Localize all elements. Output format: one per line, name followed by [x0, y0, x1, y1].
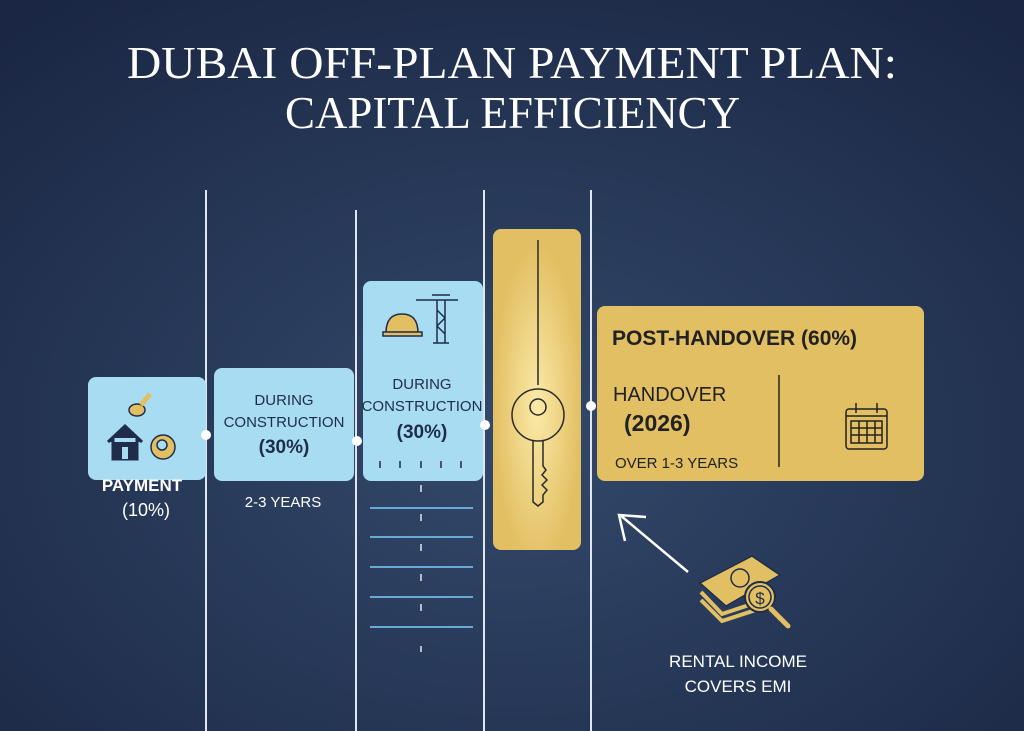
panel: post-handover 60%: POST-HANDOVER (60%) — [612, 327, 857, 350]
title — [127, 37, 897, 138]
icon: money with magnifier: $ — [755, 589, 765, 608]
panel: during construction 30% a — [214, 368, 354, 511]
panel: during construction 30% a: CONSTRUCTION — [224, 414, 344, 431]
icon: key — [512, 240, 564, 506]
arrow — [619, 515, 688, 572]
chart: schedule lines — [370, 485, 473, 652]
title: DUBAI OFF-PLAN PAYMENT PLAN: — [127, 37, 897, 88]
title: CAPITAL EFFICIENCY — [285, 87, 740, 138]
icon: helmet and crane — [383, 295, 458, 343]
icon: money with magnifier — [700, 556, 788, 626]
panel: during construction 30% a: DURING — [254, 392, 314, 409]
timeline dots — [201, 401, 596, 446]
panel: during construction 30% a: (30%) — [259, 437, 309, 458]
icon: key and house — [108, 394, 175, 459]
panel: payment 10%: PAYMENT — [102, 476, 183, 495]
panel: during construction 30% b: CONSTRUCTION — [362, 398, 482, 415]
panel: payment 10%: (10%) — [122, 500, 170, 520]
panel: post-handover 60%: OVER 1-3 YEARS — [615, 455, 738, 472]
panel: handover key — [493, 229, 581, 550]
caption: rental income: RENTAL INCOME — [669, 652, 807, 671]
caption: rental income: COVERS EMI — [685, 677, 791, 696]
panel: payment 10% — [88, 377, 206, 520]
caption: rental income — [669, 652, 807, 696]
panel: during construction 30% a: 2-3 YEARS — [245, 494, 321, 511]
panel: during construction 30% b: DURING — [392, 376, 452, 393]
panel: post-handover 60% — [597, 306, 924, 481]
icon: calendar — [846, 403, 887, 449]
panel: post-handover 60%: (2026) — [624, 410, 690, 436]
panel: post-handover 60%: HANDOVER — [613, 384, 726, 406]
panel: during construction 30% b — [362, 281, 483, 481]
panel: during construction 30% b: (30%) — [397, 422, 447, 443]
